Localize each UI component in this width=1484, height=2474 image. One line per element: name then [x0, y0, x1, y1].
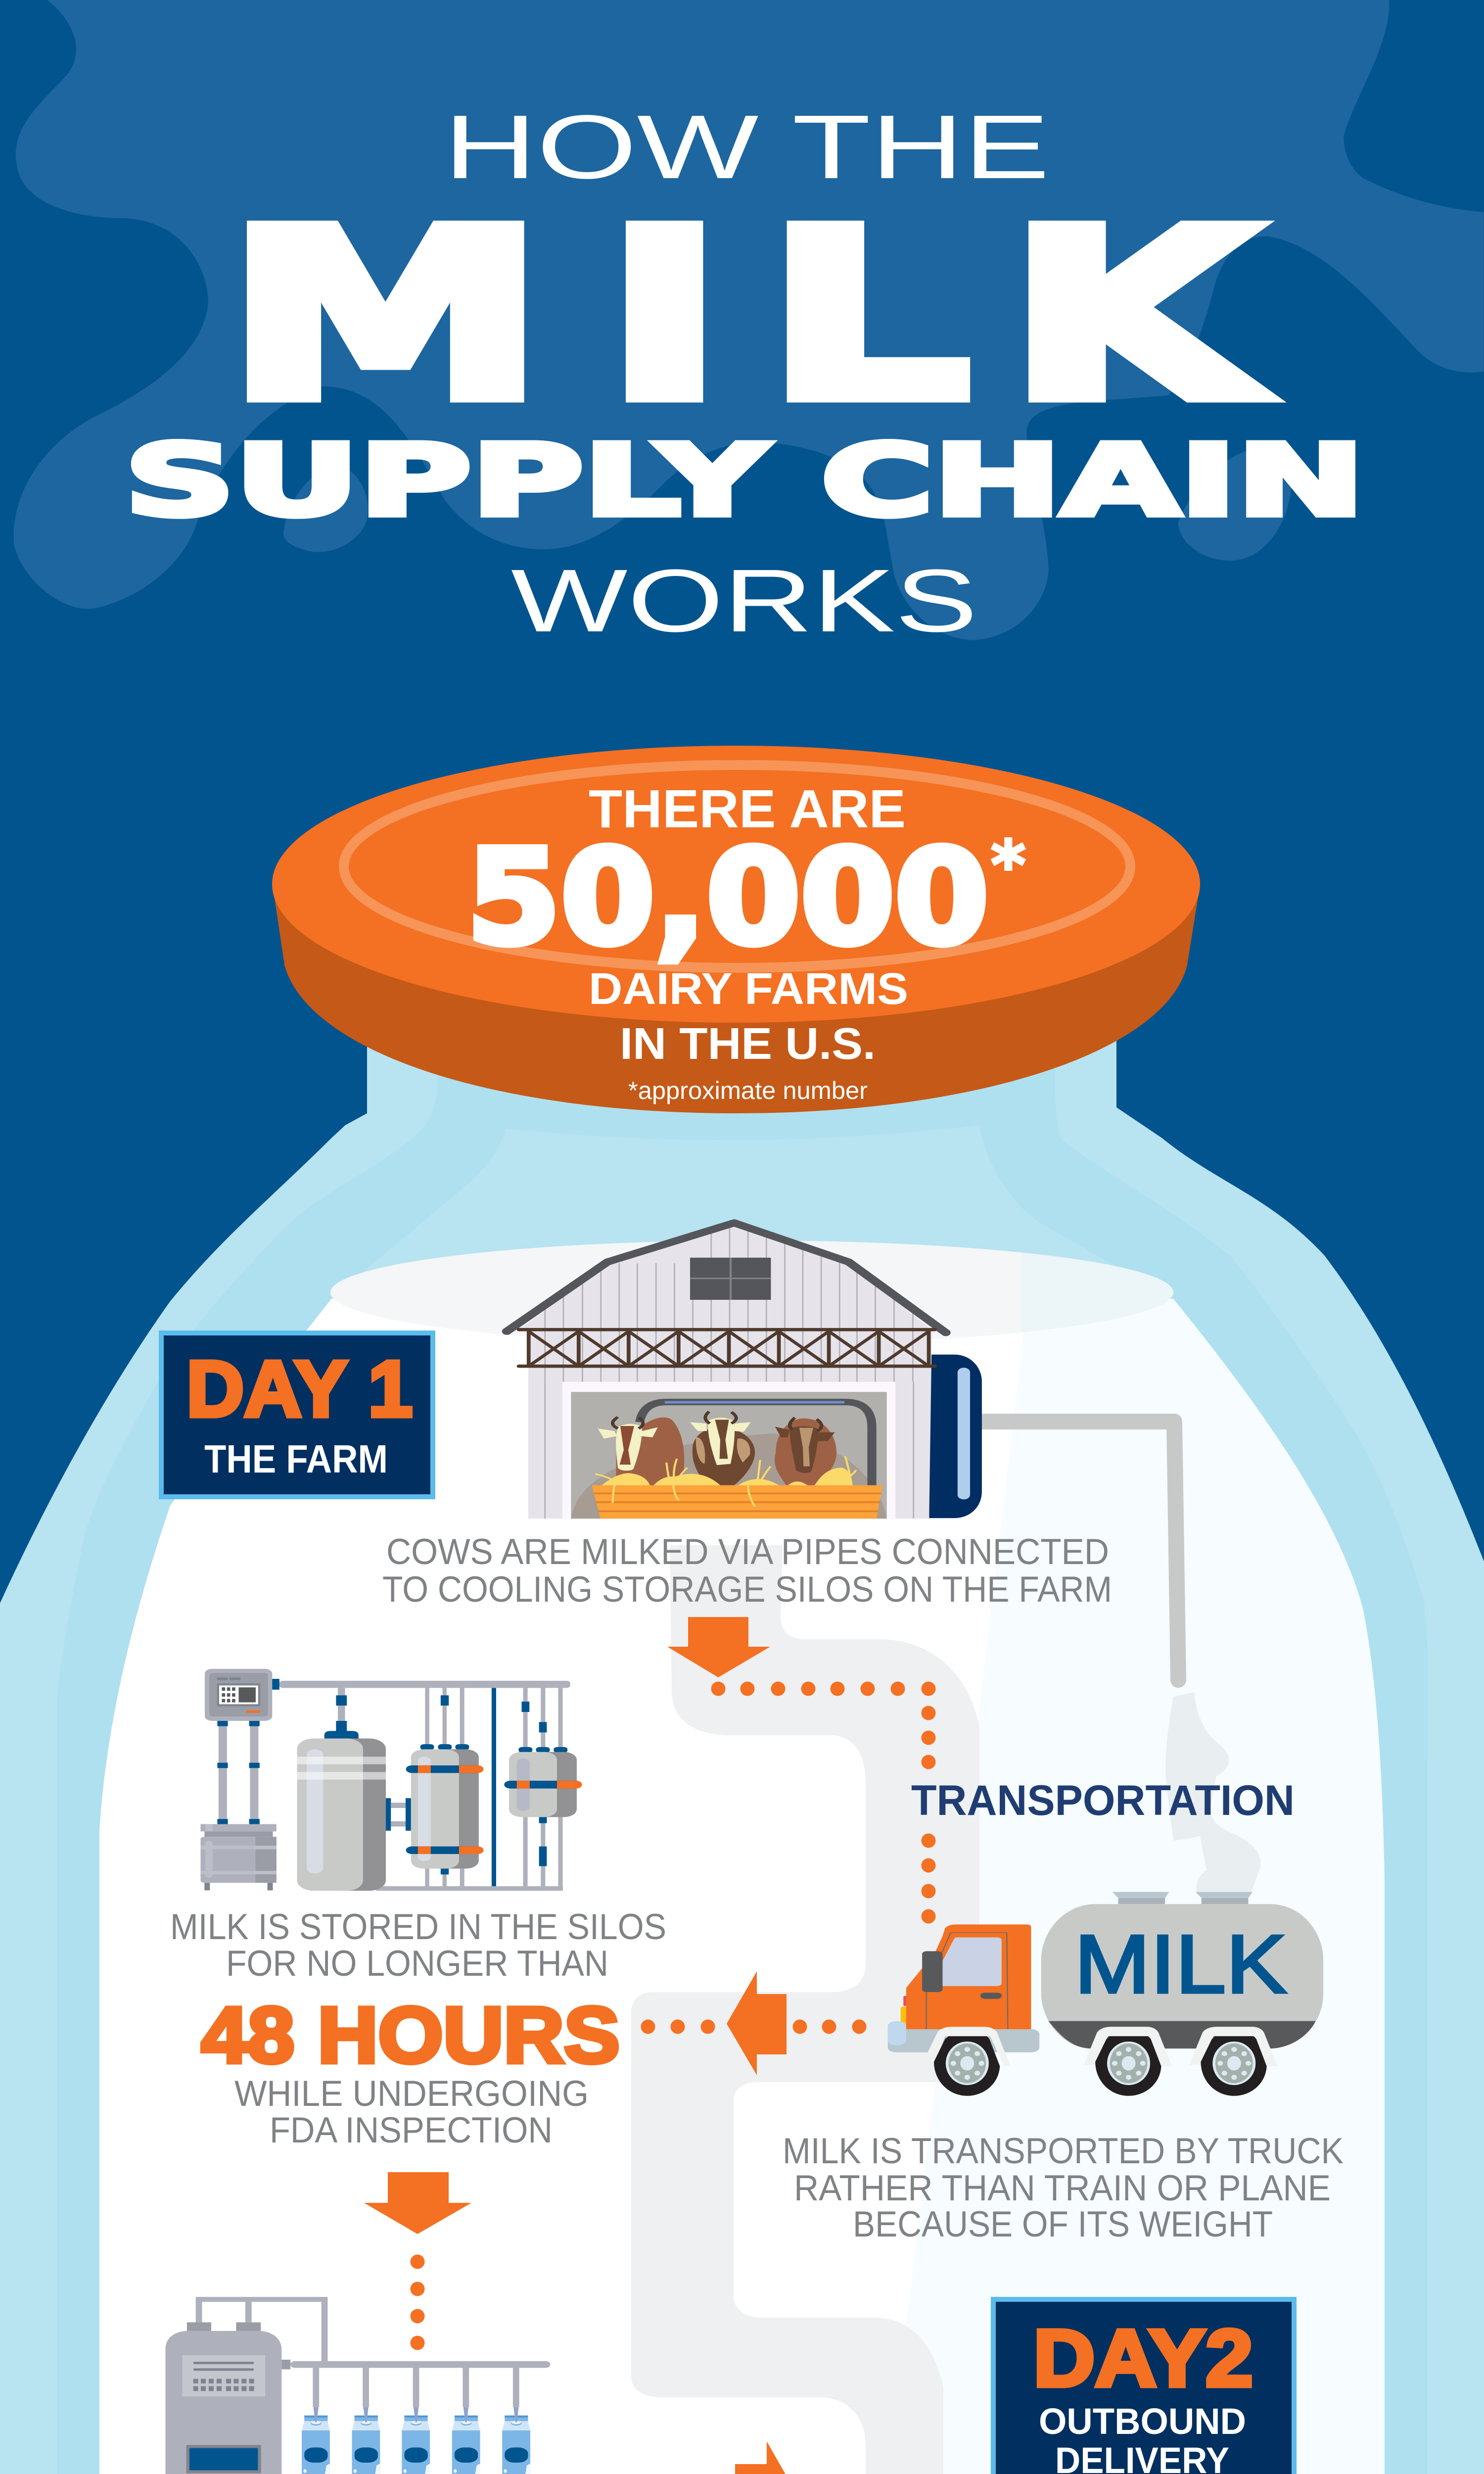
day 1 badge [161, 1333, 433, 1497]
text: silos: FOR NO LONGER THAN [226, 1944, 608, 1984]
cow 1 [598, 1417, 684, 1485]
grey milk pipe from farm [981, 1422, 1178, 1680]
lid: 50,000 dairy farms: DAIRY FARMS [589, 964, 908, 1014]
milk bottle [0, 1039, 1484, 2474]
milk pipe drip [1165, 1692, 1261, 1893]
silo connector [386, 1798, 411, 1831]
day 2 badge: OUTBOUND [1039, 2401, 1246, 2442]
barn illustration [507, 1223, 982, 1519]
barn walls [519, 1225, 932, 1519]
text: transported by truck: RATHER THAN TRAIN OR PLANE [794, 2168, 1331, 2208]
heading: transportation: TRANSPORTATION [911, 1777, 1295, 1824]
tanker truck: MILK [1074, 1918, 1287, 2010]
text: silos: FDA INSPECTION [270, 2110, 553, 2150]
pipes [272, 1679, 570, 1891]
day 2 badge [993, 2299, 1294, 2474]
filling nozzles [281, 2360, 550, 2407]
storage silos illustration [200, 1669, 582, 1891]
milk cartons [302, 2407, 530, 2474]
text: silos: MILK IS STORED IN THE SILOS [170, 1907, 666, 1947]
cow 3 [775, 1418, 836, 1485]
silo 2 [406, 1744, 484, 1874]
base unit [200, 1824, 277, 1890]
lid: 50,000 dairy farms: *approximate number [628, 1077, 868, 1104]
dotted route: to factory [411, 2254, 424, 2350]
text: transported by truck: MILK IS TRANSPORTED BY TRUCK [783, 2131, 1344, 2171]
title: MILK [226, 181, 1268, 451]
processing facility illustration [165, 2297, 631, 2474]
barn door opening [562, 1382, 895, 1519]
barn window [690, 1258, 771, 1300]
control box [205, 1669, 272, 1824]
grey background pipe [631, 1545, 979, 2474]
text: silos: WHILE UNDERGOING [234, 2074, 589, 2114]
barn roof [507, 1223, 946, 1332]
lid: 50,000 dairy farms: THERE ARE [589, 779, 906, 839]
text: silos [170, 1907, 666, 2150]
cow 2 [690, 1412, 755, 1485]
silo 3 [504, 1747, 582, 1823]
day 1 badge: DAY 1 [186, 1344, 413, 1433]
cab [888, 1924, 1039, 2052]
barn truss [519, 1330, 935, 1366]
dotted route: farm to transport [711, 1681, 936, 1924]
milk storage tank on barn [929, 1355, 982, 1518]
lid: 50,000 dairy farms: * [991, 826, 1026, 904]
text: cows are milked: TO COOLING STORAGE SILOS ON THE FARM [382, 1570, 1112, 1610]
hay [594, 1456, 856, 1507]
silo 1 [297, 1721, 386, 1891]
arrow: left to silos [727, 1971, 787, 2075]
fenders [928, 2027, 1277, 2066]
lid: 50,000 dairy farms: 50,000 [466, 822, 989, 974]
title: HOW THE [444, 96, 1050, 197]
text: cows are milked [382, 1532, 1112, 1610]
title [125, 96, 1365, 651]
feeding trough [592, 1485, 882, 1519]
arrow: down to factory [364, 2172, 471, 2234]
tank [1041, 1892, 1323, 2048]
arrow: down from farm [667, 1617, 770, 1677]
machine body [165, 2297, 327, 2474]
text: silos: 48 HOURS [201, 1991, 620, 2079]
wheels [934, 2036, 1267, 2096]
lid: 50,000 dairy farms [272, 746, 1200, 1113]
text: transported by truck: BECAUSE OF ITS WEIGHT [853, 2204, 1273, 2244]
text: transported by truck [783, 2131, 1344, 2244]
text: cows are milked: COWS ARE MILKED VIA PIPES CONNECTED [386, 1532, 1109, 1572]
arrow: right to delivery truck [735, 2441, 797, 2474]
milk splash [14, 0, 1484, 640]
title: SUPPLY CHAIN [125, 424, 1365, 538]
tanker truck [888, 1892, 1323, 2096]
day 1 badge: THE FARM [204, 1437, 388, 1481]
day 2 badge: DAY2 [1033, 2313, 1253, 2403]
dotted route: truck to silos [641, 2020, 867, 2034]
lid: 50,000 dairy farms: IN THE U.S. [620, 1019, 876, 1069]
title: WORKS [511, 551, 977, 651]
